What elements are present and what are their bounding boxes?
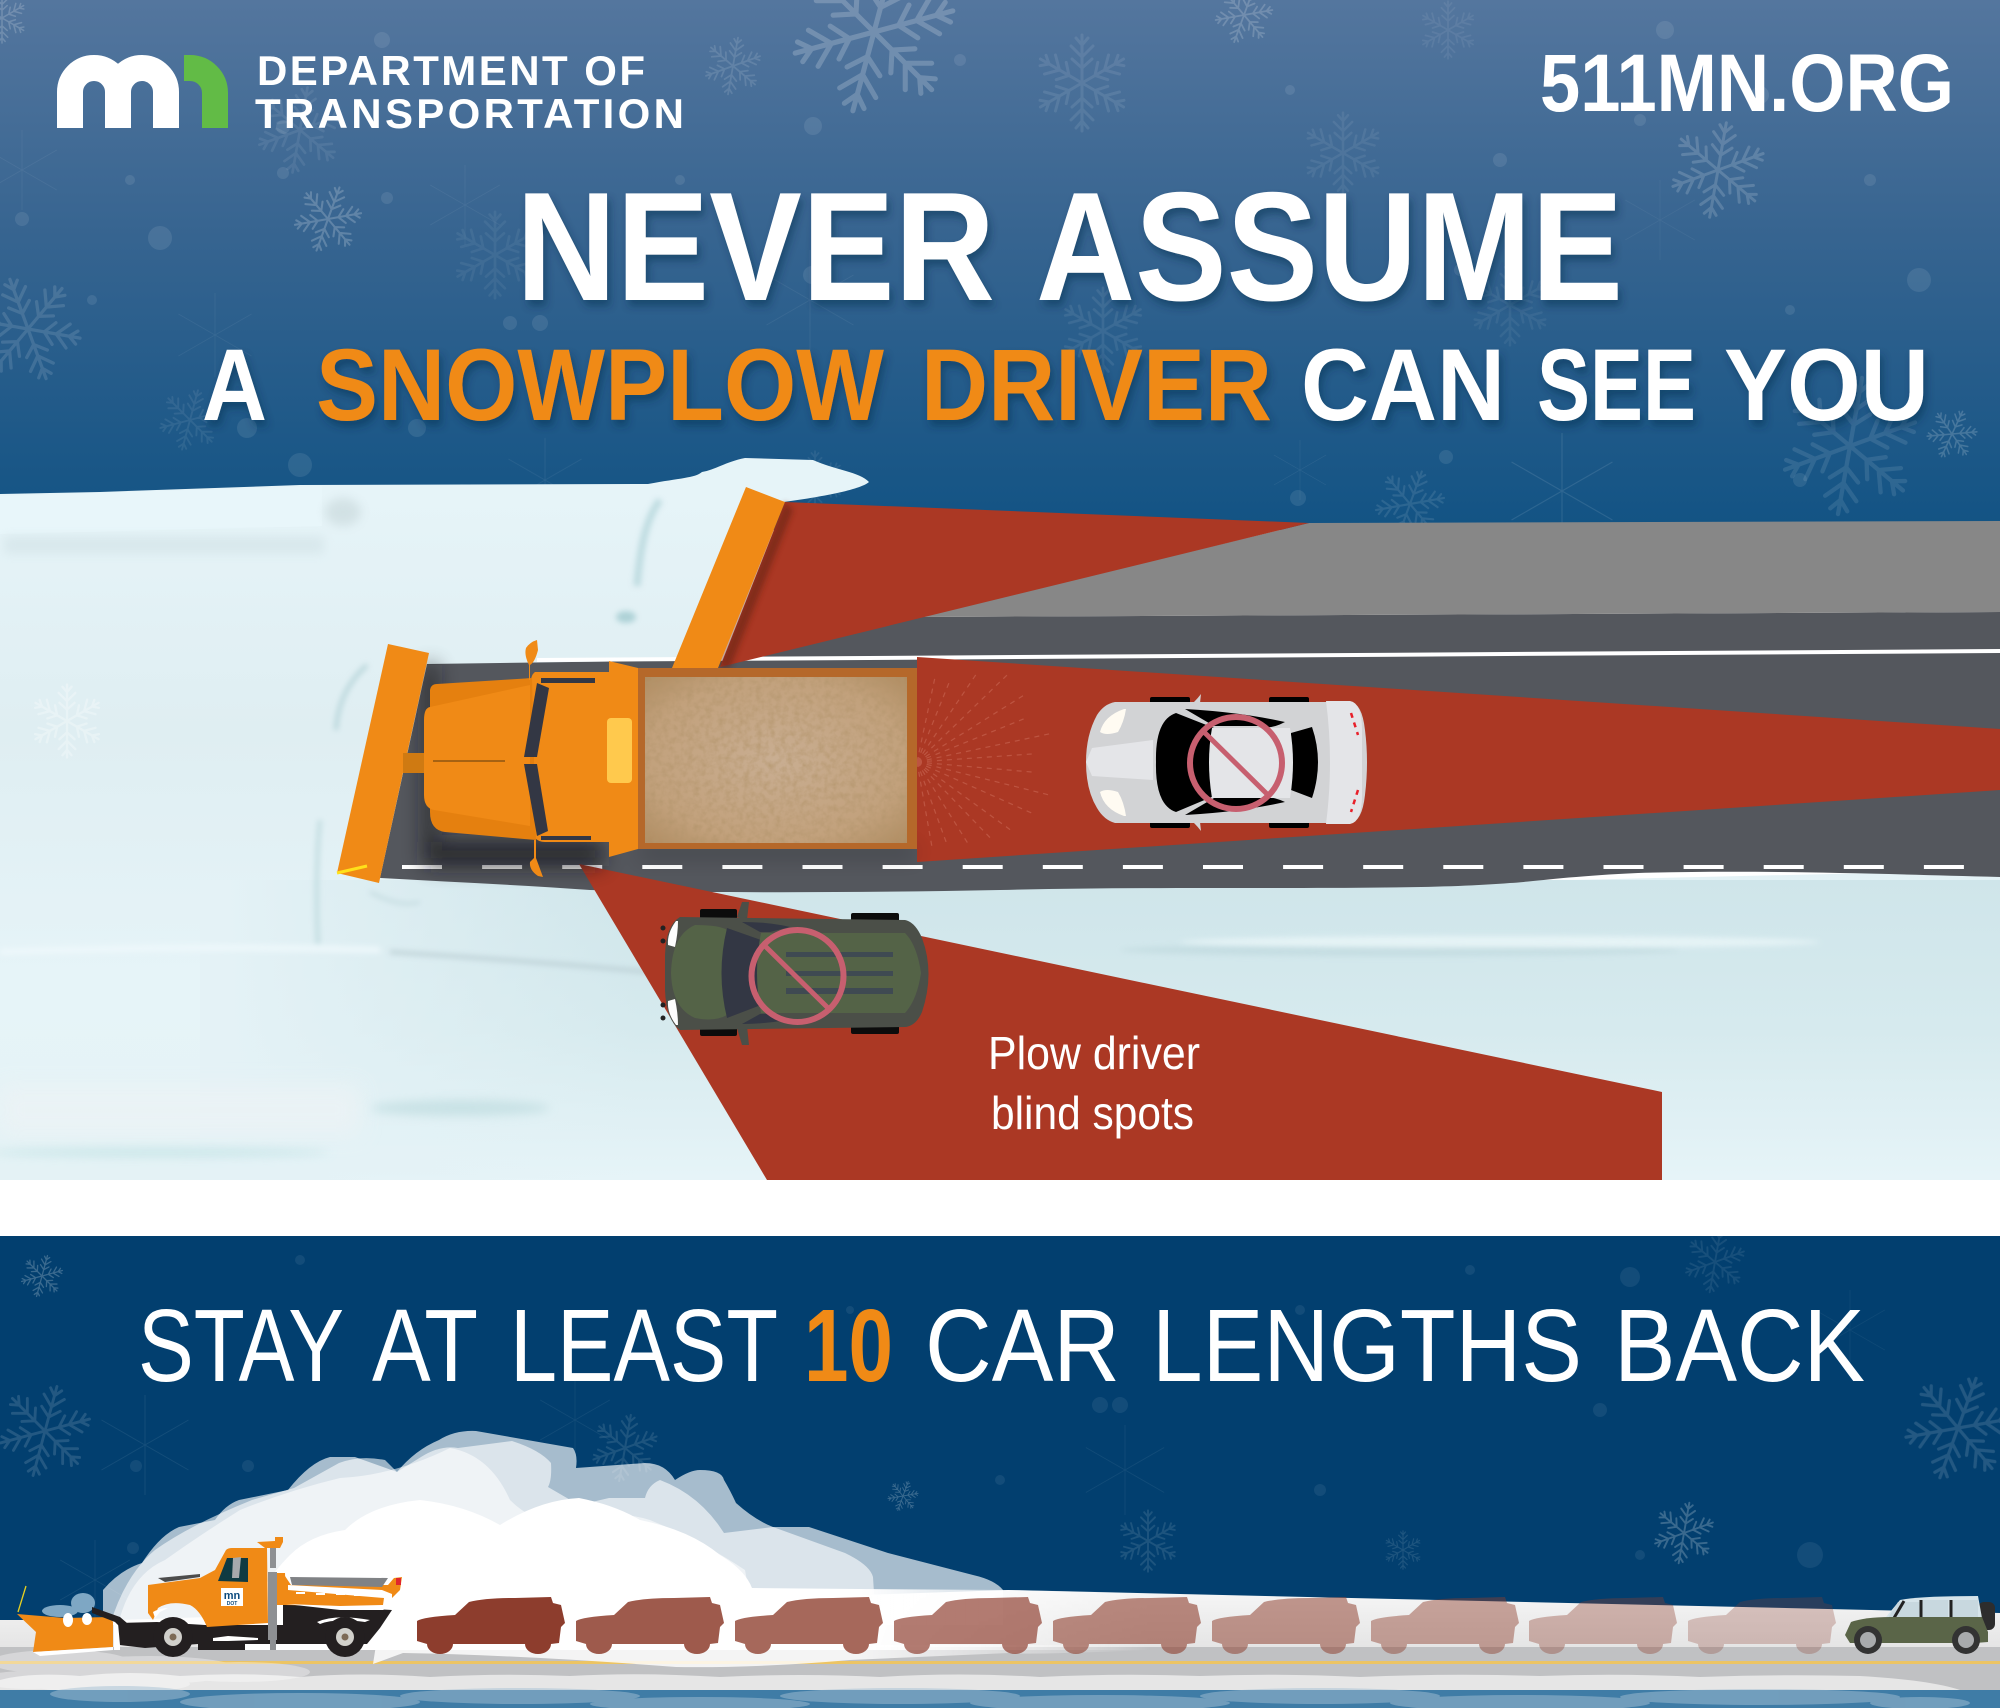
panel: snow field <box>0 458 2000 1180</box>
headlights <box>1100 709 1126 816</box>
windshield <box>722 928 761 1018</box>
car length 1 <box>417 1597 565 1654</box>
logo text <box>255 47 684 137</box>
front wheel <box>153 1617 193 1657</box>
cab <box>530 672 610 842</box>
overlay on the road <box>373 1645 1150 1667</box>
car length 8 <box>1529 1597 1677 1654</box>
cloud: inner layer <box>118 1448 755 1625</box>
blind spot: front right wedge <box>720 502 1309 667</box>
side snow strip <box>213 1617 370 1641</box>
label: plow driver blind spots: blind spots <box>991 1087 1194 1139</box>
body <box>1086 702 1367 823</box>
cab window <box>218 1558 248 1582</box>
prohibition sign <box>752 930 844 1022</box>
headline line 2: CAN <box>1301 328 1505 442</box>
tail lights <box>1351 713 1358 812</box>
door logo: mn <box>224 1590 241 1602</box>
snow spray at blade <box>42 1593 95 1617</box>
snowplow truck side view <box>17 1537 402 1657</box>
safe distance message: BACK <box>1614 1288 1865 1403</box>
headlights <box>668 921 678 1025</box>
road: solid white line <box>537 651 2000 660</box>
front lamps <box>660 926 666 1020</box>
cloud: outer layer <box>103 1431 1003 1625</box>
headline line 2: SNOWPLOW <box>316 328 885 442</box>
side plow antenna <box>18 1586 26 1612</box>
green suv in side blind spot <box>660 902 928 1045</box>
safe distance message: AT <box>372 1288 478 1403</box>
body <box>665 917 928 1030</box>
mirrors <box>737 902 749 1045</box>
car length 5 <box>1053 1597 1201 1654</box>
panel: white divider band <box>0 1180 2000 1236</box>
wing plow shadow <box>718 502 793 668</box>
snowplow truck from above <box>337 487 917 883</box>
bottom water strip <box>0 1686 2000 1708</box>
cab visor <box>257 1537 283 1548</box>
hood <box>671 925 727 1019</box>
tires <box>1150 697 1309 828</box>
amber roof light <box>607 718 632 783</box>
car length 6 <box>1212 1597 1360 1654</box>
cab flare <box>609 661 638 857</box>
cloud: white core <box>240 1498 860 1650</box>
red marker <box>396 1578 401 1585</box>
rear wheel <box>325 1617 365 1657</box>
car length 3 <box>735 1597 883 1654</box>
safe distance message: 10 <box>804 1288 893 1403</box>
dump bed frame <box>638 668 917 849</box>
website url: 511MN.ORG <box>1540 38 1954 129</box>
cloud: core fade over bank <box>860 1589 1150 1650</box>
fender snow <box>153 1608 168 1618</box>
rear of cab step <box>277 1573 286 1605</box>
headline line 2: YOU <box>1724 328 1929 442</box>
exhaust stack <box>268 1548 277 1650</box>
chassis <box>118 1604 392 1650</box>
plow mount <box>92 1607 135 1632</box>
ghost car lengths <box>417 1597 1836 1654</box>
road: dashed centre line <box>402 865 1969 869</box>
windshields <box>524 678 595 840</box>
headline line 1 <box>516 160 1623 333</box>
suv body <box>1845 1617 1988 1643</box>
label: plow driver blind spots <box>988 1027 1200 1139</box>
logo text: TRANSPORTATION <box>255 90 684 137</box>
plow arm <box>403 753 425 773</box>
headline line 1: ASSUME <box>1036 160 1623 333</box>
rays behind the truck <box>917 675 1054 847</box>
logo text: DEPARTMENT OF <box>257 47 645 94</box>
roof rack <box>786 952 893 994</box>
snow blown over road <box>0 1645 1960 1693</box>
logo: MN department of transportation <box>70 47 684 137</box>
dump bed orange <box>283 1573 402 1607</box>
dump bed grey tarp <box>290 1577 388 1587</box>
front plow blade <box>337 644 429 883</box>
door logo <box>221 1588 243 1607</box>
sand load <box>645 677 907 843</box>
car length 9 <box>1688 1597 1836 1654</box>
cab and hood <box>148 1548 268 1627</box>
mirrors <box>525 640 543 877</box>
road: gray shoulder <box>920 521 2000 617</box>
windows <box>1156 709 1318 815</box>
panel: lower sky <box>0 1227 2000 1708</box>
snow: faint flake <box>31 685 103 757</box>
hood top trim <box>158 1574 200 1582</box>
safe distance message: STAY <box>138 1288 344 1403</box>
ground: yellow line <box>0 1661 2000 1664</box>
ground: road <box>0 1647 2000 1692</box>
hood highlight <box>1086 740 1153 780</box>
safe distance message: LENGTHS <box>1152 1288 1582 1403</box>
hood rear section <box>430 678 536 840</box>
snow: drift shadows <box>637 500 660 586</box>
side mirror <box>232 1557 241 1578</box>
safe distance message: LEAST <box>510 1288 778 1403</box>
roof <box>757 933 921 1013</box>
car length 2 <box>576 1597 724 1654</box>
snowy verge clumps <box>0 1673 1960 1690</box>
logo mark <box>70 68 215 128</box>
headline line 2: SEE <box>1537 328 1696 442</box>
label: plow driver blind spots: Plow driver <box>988 1027 1200 1079</box>
prohibition sign <box>1190 717 1282 809</box>
cloud: middle layer <box>110 1441 876 1625</box>
mirrors <box>1194 694 1201 831</box>
tires <box>700 909 899 1036</box>
suv roof and windows <box>1886 1596 1982 1618</box>
panel: sky background <box>0 0 2000 549</box>
suv wheels <box>1854 1626 1980 1654</box>
silver car in rear blind spot <box>1086 694 1367 831</box>
headline <box>202 160 1929 442</box>
headline line 2: A <box>202 328 267 442</box>
road <box>380 521 2000 892</box>
blind spot: right side wedge <box>579 864 1662 1180</box>
hood main <box>424 685 530 826</box>
headline line 1: NEVER <box>516 160 995 333</box>
headline line 2 <box>202 328 1929 442</box>
safe distance message <box>138 1288 1865 1403</box>
ground: snow bank <box>0 1590 2000 1650</box>
spare tire <box>1978 1602 1995 1630</box>
side plow blade <box>17 1614 113 1652</box>
bed snow and markers <box>286 1585 392 1610</box>
wing plow <box>672 487 785 668</box>
door logo: DOT <box>227 1601 237 1607</box>
snow puffs left <box>0 1650 310 1693</box>
car length 4 <box>894 1597 1042 1654</box>
headline line 2: DRIVER <box>921 328 1272 442</box>
green suv side view <box>1845 1596 1995 1654</box>
roof <box>1209 728 1293 798</box>
snow cloud behind plow <box>103 1431 1150 1650</box>
car length 7 <box>1371 1597 1519 1654</box>
blind spot: rear wedge <box>917 657 2000 862</box>
snow: upper-left plowed strip <box>0 486 322 534</box>
rear deck <box>1326 701 1362 824</box>
truck cast shadows <box>424 665 915 866</box>
safe distance message: CAR <box>925 1288 1120 1403</box>
hood centre seam <box>433 760 505 762</box>
snow along blade <box>33 1613 120 1656</box>
